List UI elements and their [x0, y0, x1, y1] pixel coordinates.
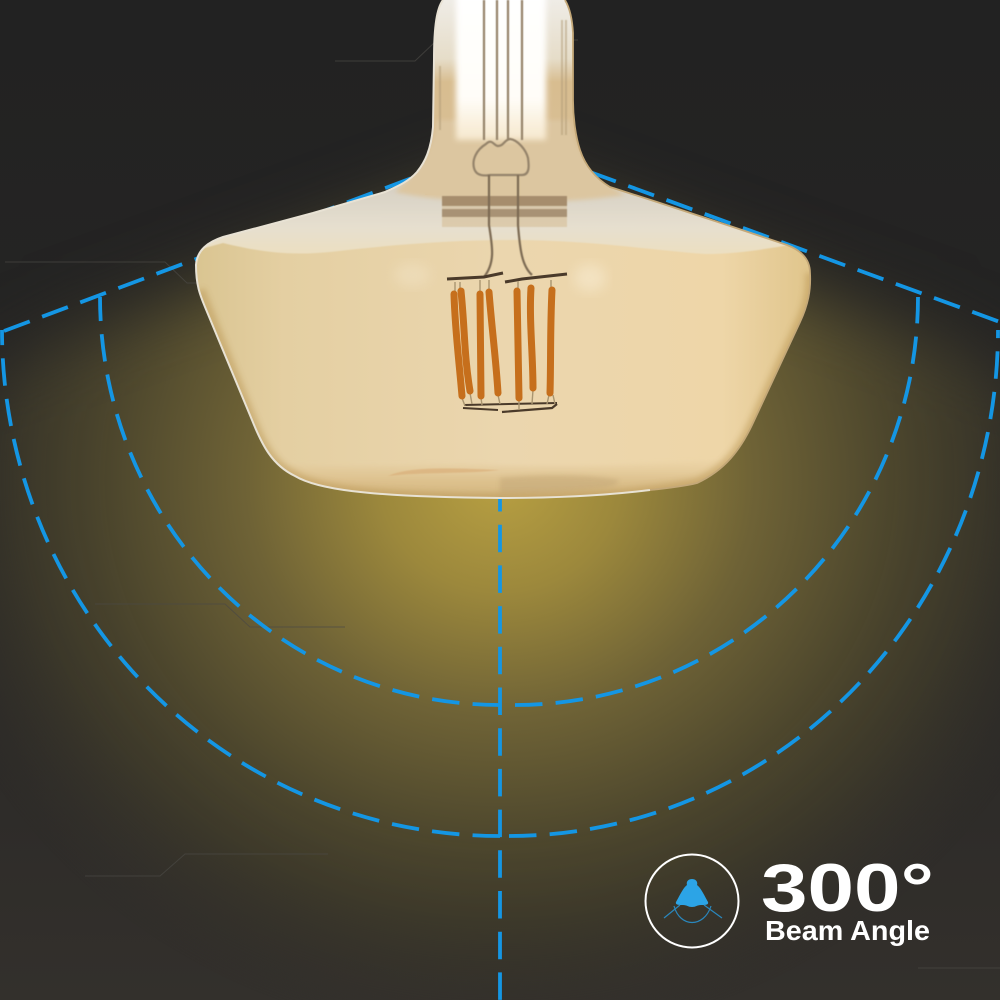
- label: beam angle: Beam Angle: [765, 915, 930, 946]
- glass body: [197, 239, 810, 480]
- outer arc right: [509, 330, 998, 836]
- centre line: [498, 484, 502, 1000]
- icon: beam arc: [664, 905, 722, 922]
- bulb glass: [190, 0, 815, 505]
- glass outline light: [196, 0, 650, 498]
- outer arc left: [2, 330, 500, 836]
- beam angle badge: [646, 850, 934, 948]
- inner arc left: [100, 297, 500, 705]
- inner amber edge: [200, 273, 810, 498]
- bottom darker reflection: [500, 475, 616, 492]
- right beam edge: [590, 172, 1000, 322]
- light bulb: [190, 0, 815, 505]
- neck side glass: [428, 0, 582, 159]
- filaments: [454, 288, 552, 398]
- icon: lamp silhouette: [676, 879, 708, 907]
- bubble streak: [388, 468, 500, 476]
- glass stem: [474, 0, 532, 277]
- left beam edge: [4, 178, 412, 331]
- stripes behind neck base: [442, 196, 567, 227]
- filament supports: [447, 273, 567, 412]
- bottom glass band: [296, 466, 714, 497]
- glass outline amber: [565, 0, 810, 490]
- neck base blend: [395, 120, 625, 202]
- filament wire stubs: [455, 280, 555, 410]
- shoulder highlight band: [204, 182, 786, 254]
- inner arc right: [515, 297, 918, 705]
- value: 300 degrees: 300°: [761, 850, 934, 926]
- neck inner stripes: [440, 20, 566, 135]
- warm light glow: [0, 170, 1000, 941]
- neck bright centre: [456, 0, 546, 140]
- soft side highlights: [398, 266, 426, 284]
- icon: beam angle circle: [646, 854, 738, 948]
